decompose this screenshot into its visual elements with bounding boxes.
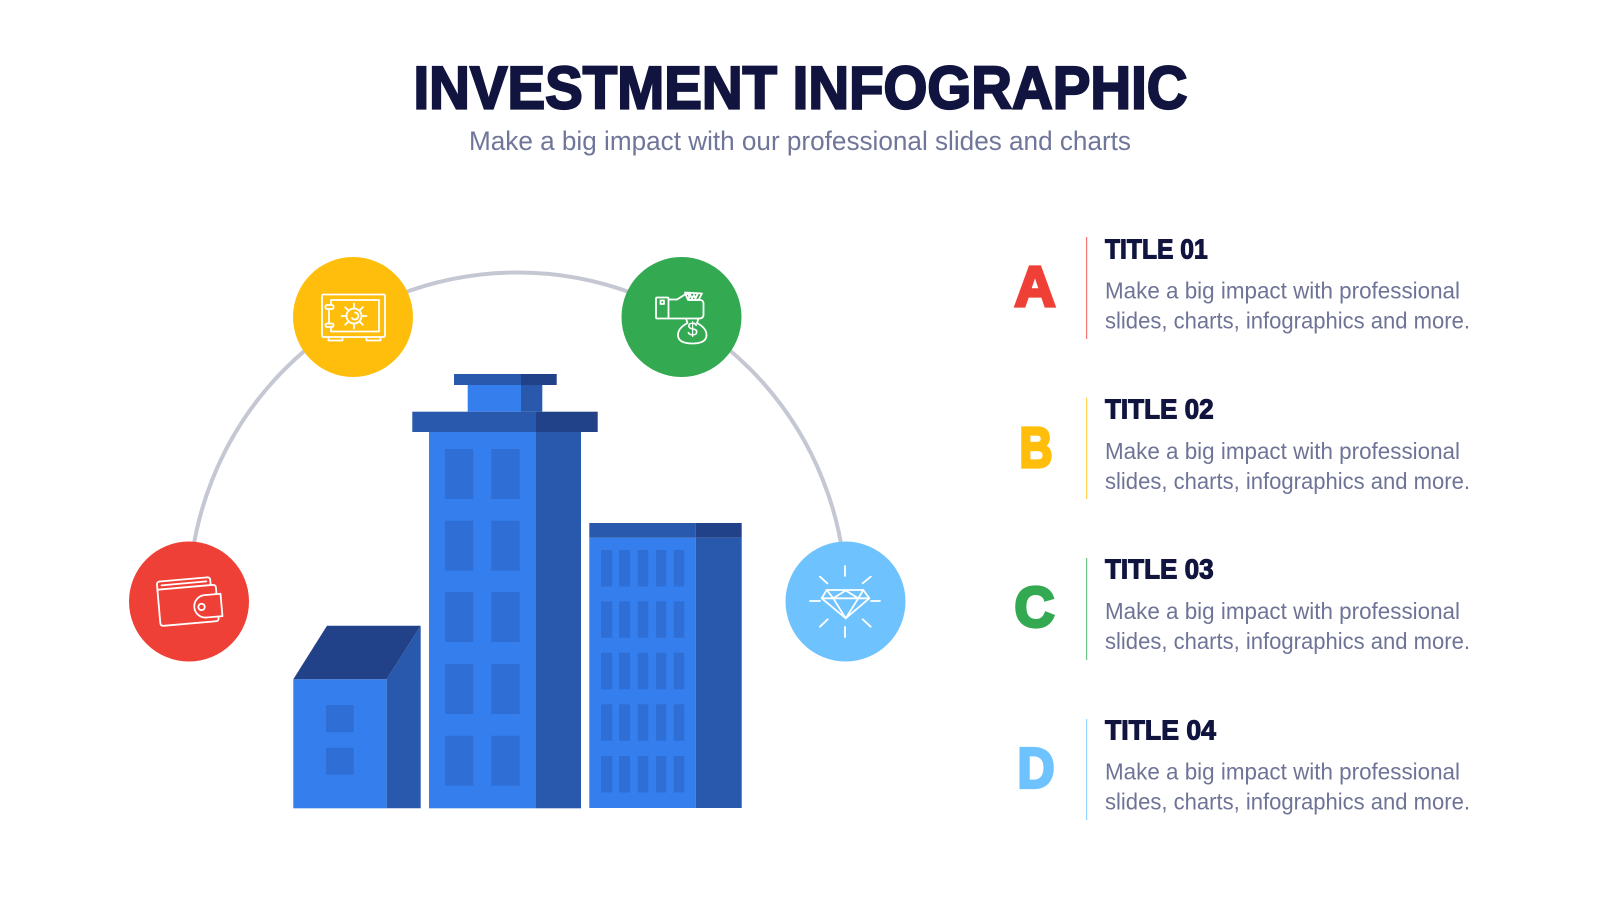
item B: TITLE 02 (1105, 394, 1214, 425)
item D (1018, 715, 1470, 820)
item D: TITLE 04 (1105, 715, 1216, 746)
icon: safe (293, 257, 413, 377)
item C: slides, charts, infographics and more. (1105, 628, 1470, 654)
item A: slides, charts, infographics and more. (1105, 307, 1470, 333)
item C (1014, 554, 1470, 660)
item C: TITLE 03 (1105, 554, 1214, 585)
building: right block (589, 523, 742, 808)
item C: C (1014, 576, 1054, 640)
item D: slides, charts, infographics and more. (1105, 789, 1470, 815)
building: tall centre tower (412, 374, 598, 808)
icon: diamond (786, 542, 906, 662)
item B (1020, 394, 1470, 499)
item B: slides, charts, infographics and more. (1105, 468, 1470, 494)
item A: TITLE 01 (1105, 234, 1208, 265)
building: small left house (293, 626, 421, 808)
item D: Make a big impact with professional (1105, 759, 1460, 785)
item A: Make a big impact with professional (1105, 277, 1460, 303)
title: INVESTMENT INFOGRAPHIC (414, 54, 1188, 122)
item B: B (1020, 416, 1052, 480)
item C: Make a big impact with professional (1105, 598, 1460, 624)
subtitle: Make a big impact with our professional slides and charts (469, 126, 1131, 156)
arc connecting the icons (189, 273, 846, 601)
item A: A (1014, 255, 1056, 319)
item D: D (1018, 736, 1054, 800)
item B: Make a big impact with professional (1105, 438, 1460, 464)
dollar sign: $ (687, 320, 698, 341)
item A (1014, 234, 1470, 339)
icon: wallet (129, 542, 249, 662)
icon: hand holding money bag (622, 257, 742, 377)
